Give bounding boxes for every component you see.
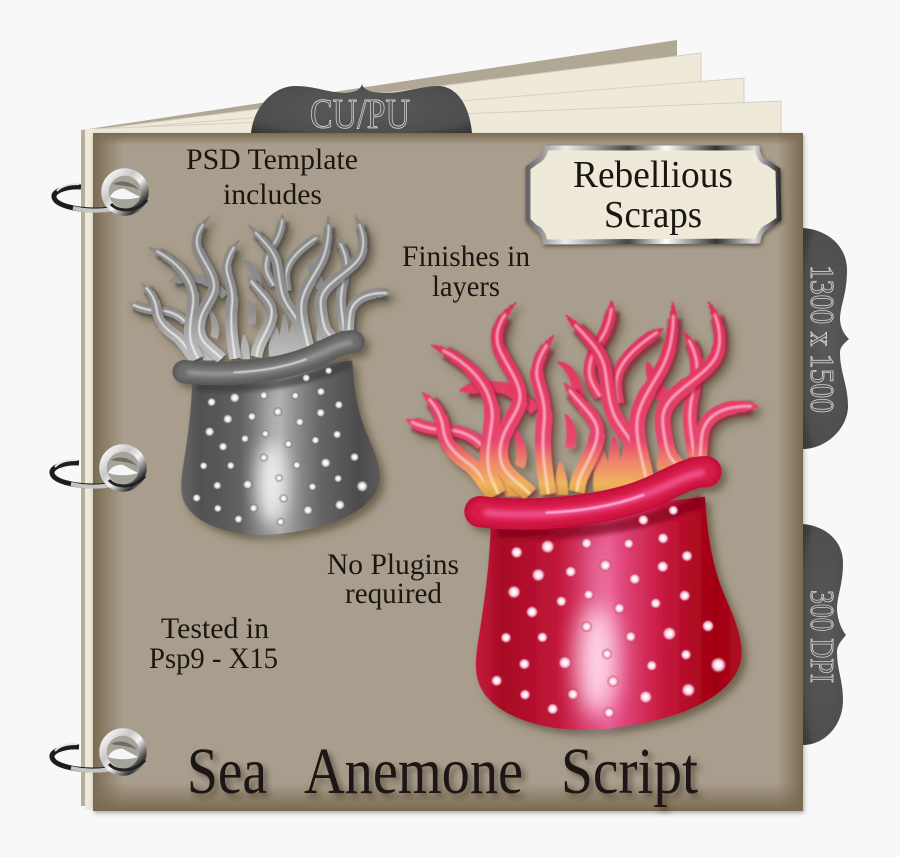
text: PSD Template includes: includes <box>223 178 322 211</box>
binder ring middle <box>52 448 145 488</box>
text: No Plugins required: required <box>345 577 442 610</box>
label plate: Rebellious Scraps <box>528 148 779 242</box>
text: PSD Template includes: PSD Template <box>186 143 358 176</box>
label plate: Rebellious Scraps: Rebellious <box>573 154 733 196</box>
title: Sea Anemone Script: Anemone <box>304 735 523 808</box>
tab: 300 DPI <box>803 524 846 745</box>
text: Tested in Psp9 - X15: Tested in <box>161 612 269 645</box>
text: Finishes in layers: layers <box>432 270 500 303</box>
title: Sea Anemone Script: Sea <box>187 735 267 808</box>
tab: 1300 x 1500 <box>803 228 849 449</box>
book cover and spine <box>81 129 803 811</box>
text: Tested in Psp9 - X15 <box>149 612 278 675</box>
text: PSD Template includes <box>186 143 358 211</box>
title: Sea Anemone Script: Script <box>561 735 698 808</box>
text: No Plugins required: No Plugins <box>327 548 459 581</box>
tab: CU/PU: CU/PU <box>310 92 410 138</box>
tab: 1300 x 1500: 1300 x 1500 <box>803 265 840 413</box>
binder ring top <box>54 172 147 212</box>
back pages of the book <box>82 40 781 135</box>
grey anemone illustration <box>129 214 394 535</box>
text: Tested in Psp9 - X15: Psp9 - X15 <box>149 642 278 675</box>
tab: CU/PU <box>251 84 472 138</box>
tab: 300 DPI: 300 DPI <box>803 590 840 683</box>
text: No Plugins required <box>327 548 459 610</box>
text: Finishes in layers: Finishes in <box>402 240 530 273</box>
red anemone illustration <box>406 301 760 730</box>
text: Finishes in layers <box>402 240 530 303</box>
label plate: Rebellious Scraps: Scraps <box>604 194 702 236</box>
title: Sea Anemone Script <box>187 735 698 808</box>
binder ring bottom <box>52 732 145 772</box>
